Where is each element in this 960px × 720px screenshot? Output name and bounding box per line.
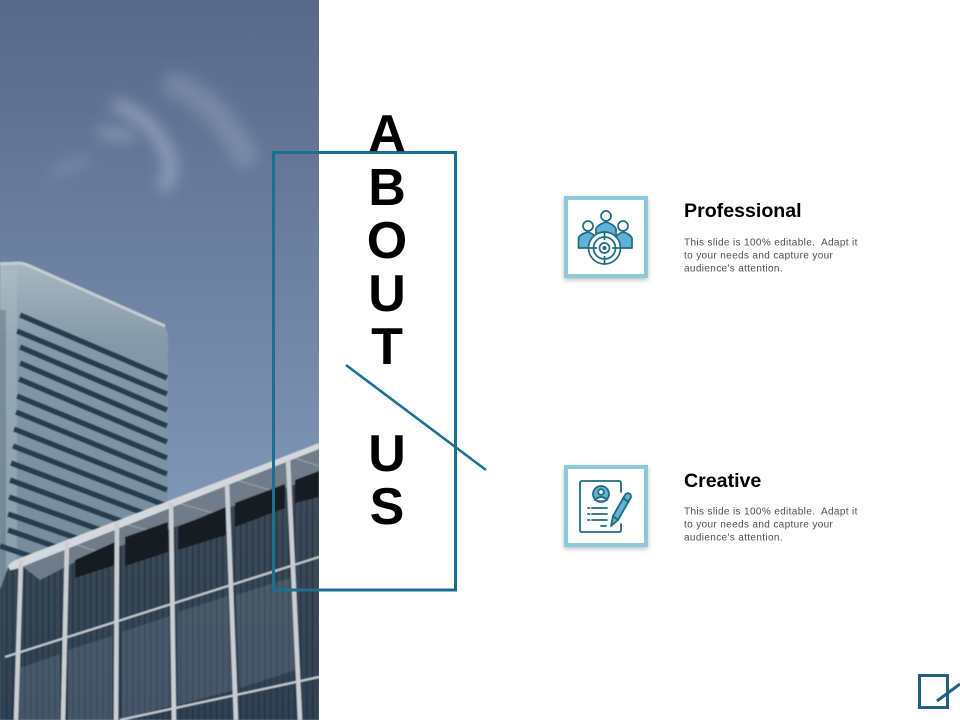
roof canopy [22, 449, 319, 580]
text block: Professional description: audience's attention. [684, 264, 783, 274]
frame: teal rectangle behind title [274, 152, 456, 590]
clouds [55, 85, 245, 185]
mullions [5, 557, 319, 720]
tower [0, 262, 168, 660]
card: Professional [566, 198, 858, 276]
text block: Professional description: to your needs and capture your [684, 250, 834, 262]
text block: Creative description: audience's attention. [684, 532, 783, 544]
text block: Professional description: This slide is 100% editable. Adapt it [684, 238, 858, 248]
text block: Creative description: to your needs and capture your [684, 520, 834, 530]
title: ABOUT US vertical: S [370, 478, 404, 536]
roof edge [8, 443, 319, 570]
text block: Creative description: This slide is 100% editable. Adapt it [684, 506, 858, 518]
icon: team with target [578, 211, 632, 265]
diagonal accent line [346, 365, 486, 470]
title: ABOUT US vertical: B [368, 159, 406, 217]
icon: profile document with pencil [580, 481, 631, 532]
dark band under canopy [75, 471, 319, 578]
icon box: Professional [566, 198, 646, 276]
title: ABOUT US vertical: U [368, 425, 406, 483]
title: ABOUT US vertical: U [368, 265, 406, 323]
photo: office buildings against the sky [0, 0, 319, 720]
title: ABOUT US vertical [367, 105, 407, 536]
text block: Creative description [684, 506, 858, 544]
card: Creative [566, 467, 858, 545]
columns [16, 460, 300, 720]
icon box: Creative [566, 467, 646, 545]
reflections [18, 578, 296, 720]
title: ABOUT US vertical: O [367, 212, 407, 270]
heading: Professional: Professional [684, 200, 802, 222]
heading: Creative: Creative [684, 470, 761, 492]
lower building [0, 443, 319, 720]
title: ABOUT US vertical: A [368, 105, 406, 163]
text block: Professional description [684, 238, 858, 274]
corner logo: square with slash [920, 676, 960, 708]
title: ABOUT US vertical: T [371, 318, 403, 376]
